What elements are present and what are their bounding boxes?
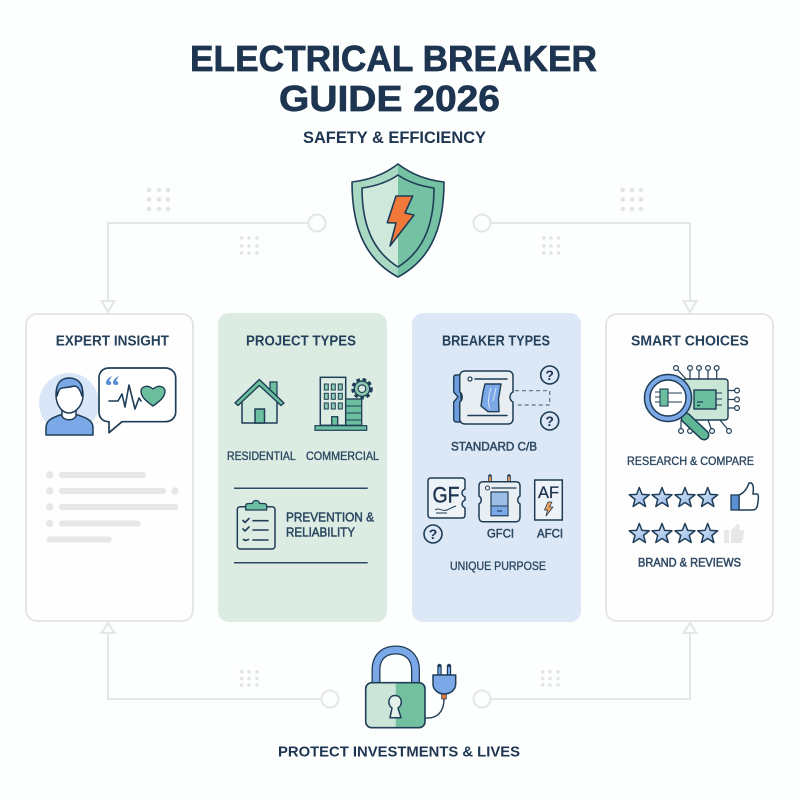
label: unique purpose: UNIQUE PURPOSE: [450, 559, 546, 573]
label: residential: RESIDENTIAL: [227, 451, 296, 463]
connector: shield to smart choices: [474, 214, 696, 312]
text: prevention and reliability: [286, 511, 375, 540]
icon: house: [235, 380, 284, 423]
heading: project types: PROJECT TYPES: [246, 334, 356, 350]
breaker connection dashes: [515, 391, 550, 405]
stars row two: [629, 524, 718, 542]
icon: faded thumbs up: [724, 524, 744, 543]
icon: GFCI breaker: [479, 476, 520, 522]
text: prevention and reliability: RELIABILITY: [286, 526, 356, 540]
label: standard c/b: STANDARD C/B: [451, 440, 537, 454]
heading: smart choices: SMART CHOICES: [631, 334, 749, 350]
heading: breaker types: BREAKER TYPES: [442, 334, 550, 350]
placeholder text lines: [46, 471, 179, 542]
panel: smart choices: [606, 314, 773, 621]
icon: question top: [541, 366, 559, 384]
connector: lock to smart choices: [474, 623, 696, 708]
label: commercial: COMMERCIAL: [306, 451, 380, 463]
icon: AF box: AF: [538, 483, 559, 502]
icon: shield with lightning bolt: [352, 164, 444, 277]
panel: breaker types: [412, 313, 581, 622]
title: ELECTRICAL BREAKER: [190, 38, 597, 79]
label: brand and reviews: BRAND & REVIEWS: [638, 556, 741, 570]
decorative dot grids: [147, 188, 643, 687]
subtitle: SAFETY & EFFICIENCY: [303, 129, 486, 147]
icon: magnifier over circuit chip: [644, 366, 739, 435]
connector: shield to expert insight: [102, 214, 326, 312]
connector: lock to expert insight: [102, 623, 338, 708]
icon: question bottom: [541, 412, 559, 430]
panel: expert insight: [26, 314, 193, 621]
icon: GF box: GF: [432, 483, 460, 508]
label: research and compare: RESEARCH & COMPARE: [627, 456, 754, 468]
icon: GF box: [428, 478, 465, 518]
title: [190, 38, 597, 119]
icon: expert portrait: [39, 373, 99, 435]
icon: question top: ?: [545, 367, 554, 383]
icon: standard circuit breaker: [454, 371, 513, 424]
divider top: [234, 487, 368, 489]
icon: question GF: [424, 525, 442, 543]
text: prevention and reliability: PREVENTION &: [286, 511, 375, 525]
label: AFCI: AFCI: [537, 527, 563, 541]
icon: question bottom: ?: [545, 413, 554, 429]
icon: commercial building with gear: [315, 377, 371, 430]
divider bottom: [234, 562, 368, 564]
title: GUIDE 2026: [279, 78, 500, 119]
heading: expert insight: EXPERT INSIGHT: [56, 334, 169, 350]
label: GFCI: GFCI: [487, 527, 514, 541]
stars row one: [629, 488, 718, 506]
icon: padlock with plug: [366, 650, 456, 728]
caption: protect investments and lives: PROTECT INVESTMENTS & LIVES: [278, 744, 520, 761]
icon: speech bubble with heartbeat: [99, 368, 176, 433]
icon: question GF: ?: [429, 526, 437, 542]
panel: project types: [218, 313, 387, 622]
icon: thumbs up: [731, 483, 758, 510]
icon: AF box: [535, 480, 562, 520]
icon: clipboard checklist: [237, 500, 275, 549]
